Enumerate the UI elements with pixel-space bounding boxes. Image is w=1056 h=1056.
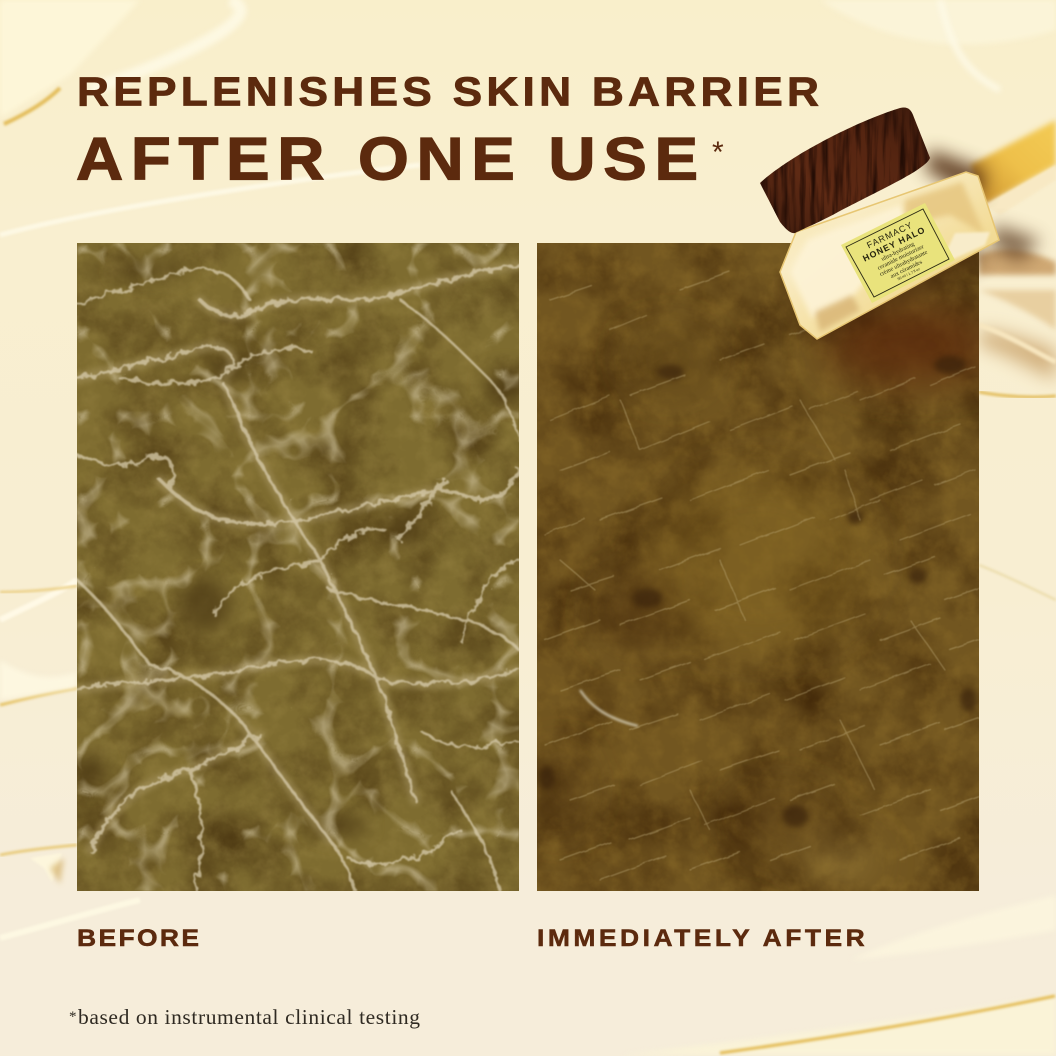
fine streak veins bbox=[545, 272, 979, 880]
title line 2: AFTER ONE USE bbox=[76, 126, 698, 193]
label text bbox=[857, 216, 940, 291]
veins bbox=[77, 265, 519, 891]
icon: product jar bbox=[760, 107, 999, 345]
label text: aux céramides bbox=[890, 259, 924, 280]
label text: 50 ml / 1.7 fl oz bbox=[897, 267, 921, 281]
jar label bbox=[841, 203, 955, 303]
panel: before bbox=[76, 243, 525, 891]
label text: crème ultrahydratante bbox=[879, 249, 929, 278]
label: immediately after: IMMEDIATELY AFTER bbox=[537, 925, 865, 952]
footnote asterisk: * bbox=[69, 1009, 76, 1025]
lace veins bbox=[77, 243, 519, 891]
brown shading bbox=[534, 305, 995, 878]
title asterisk: * bbox=[712, 136, 724, 169]
dark spots bbox=[539, 356, 976, 827]
label text: FARMACY bbox=[865, 220, 914, 250]
white scratch bbox=[580, 690, 638, 726]
label text: HONEY HALO bbox=[861, 225, 927, 264]
vein halo bbox=[77, 265, 519, 850]
label text: ultra-hydrating bbox=[881, 242, 916, 263]
footnote text: based on instrumental clinical testing bbox=[78, 1005, 420, 1029]
footnote bbox=[69, 1005, 420, 1029]
jar body bbox=[780, 172, 999, 339]
jar lid bbox=[760, 107, 930, 233]
panel: immediately after bbox=[534, 243, 995, 891]
label: before: BEFORE bbox=[77, 925, 199, 952]
title line 1: REPLENISHES SKIN BARRIER bbox=[77, 69, 819, 115]
jar shadow bbox=[782, 195, 985, 345]
title bbox=[76, 69, 819, 193]
label text: ceramide moisturizer bbox=[877, 244, 925, 272]
dark patches bbox=[76, 261, 525, 837]
